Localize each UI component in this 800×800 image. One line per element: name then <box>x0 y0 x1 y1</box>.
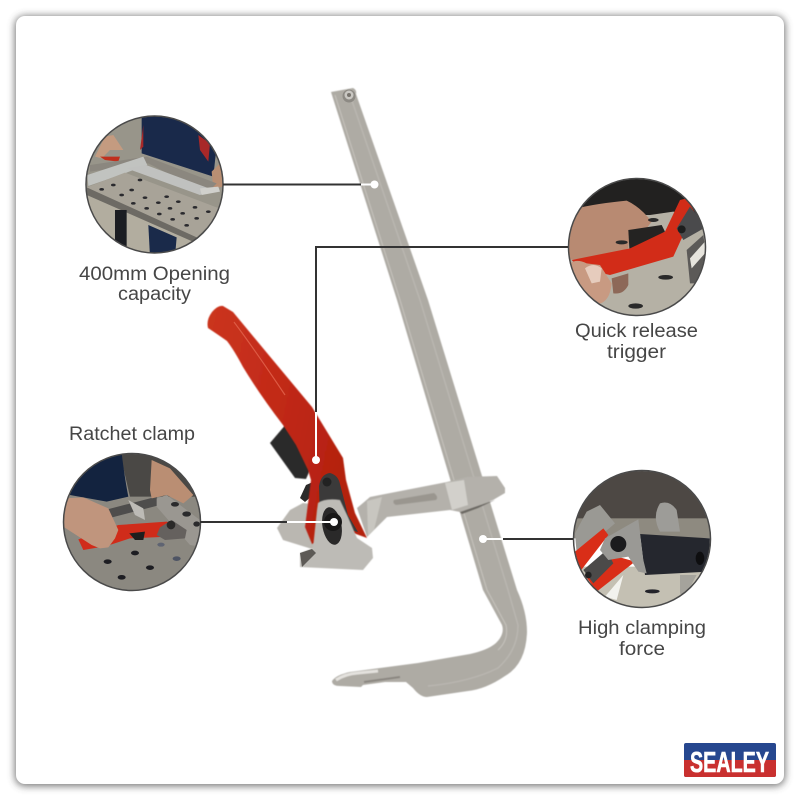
bolt at bar top <box>342 90 356 102</box>
label <box>575 321 698 363</box>
black clamp bolt <box>319 506 345 546</box>
photo ring <box>568 178 706 316</box>
leader tip <box>479 535 503 543</box>
leader tip <box>312 412 320 464</box>
label: Ratchet clamp <box>69 424 195 445</box>
photo: hands with clamp <box>60 450 203 593</box>
grey side plate <box>319 473 358 532</box>
clamp product image <box>208 88 527 697</box>
leader line <box>503 538 573 540</box>
photo ring <box>86 116 223 253</box>
callout: ratchet clamp <box>60 424 338 593</box>
red handle <box>208 306 367 544</box>
clamp bar with curved jaw <box>331 88 527 697</box>
photo ring <box>574 470 710 608</box>
label <box>578 618 706 660</box>
leader tip <box>287 518 338 526</box>
photo: workbench clamping <box>86 116 222 252</box>
label: Quick release <box>575 321 698 342</box>
rivet <box>322 478 332 486</box>
small black pawl <box>300 482 313 502</box>
callout: quick release trigger <box>312 177 710 464</box>
callout: 400mm opening <box>79 110 378 305</box>
logo: SEALEY <box>684 743 776 779</box>
black trigger <box>270 423 310 479</box>
handle highlight <box>234 322 285 395</box>
label: trigger <box>607 342 667 363</box>
leader line <box>316 247 568 412</box>
label: High clamping <box>578 618 706 639</box>
callout: high clamping force <box>479 467 713 660</box>
photo ring <box>64 454 200 590</box>
silver clamp body <box>300 499 373 570</box>
leader tip <box>361 180 378 188</box>
label: 400mm Opening <box>79 264 230 285</box>
photo: clamp close-up <box>570 467 713 610</box>
body underside shade <box>300 549 316 567</box>
label: force <box>619 639 665 660</box>
label: capacity <box>118 284 192 305</box>
leader line <box>200 521 287 523</box>
sliding jaw arm <box>357 476 505 537</box>
ratchet teeth plate <box>277 503 320 549</box>
leader line <box>223 184 361 186</box>
photo: hand on trigger <box>567 177 710 317</box>
label <box>79 264 230 305</box>
